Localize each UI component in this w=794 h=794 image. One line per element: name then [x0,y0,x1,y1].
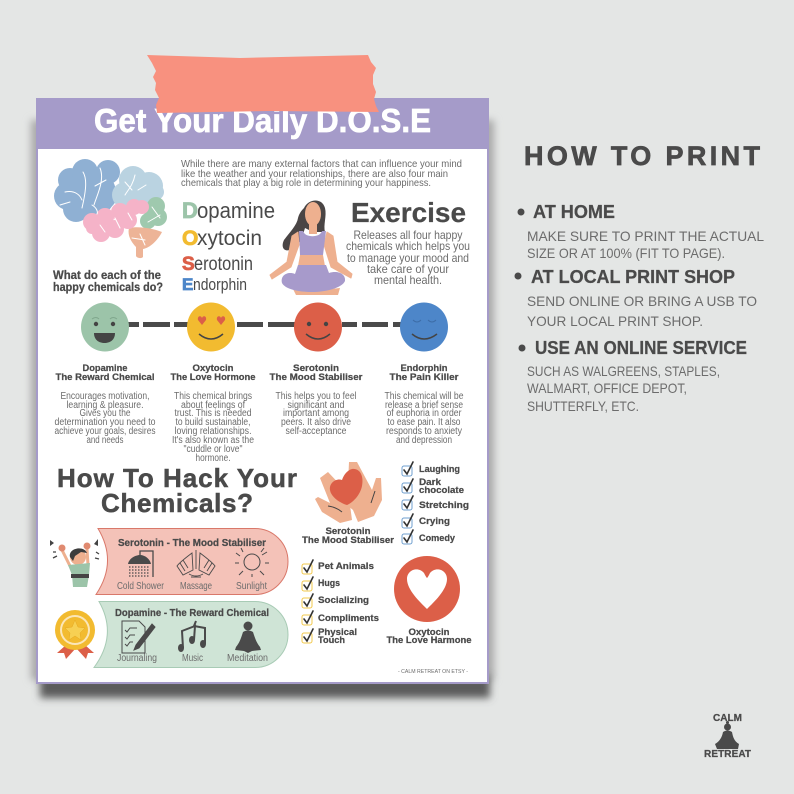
serotonin caption [302,526,394,546]
column: serotonin: important among [283,408,349,419]
checklist: oxytocin [302,560,379,646]
icon: award medal [55,610,95,659]
panel: serotonin hacks [96,528,288,594]
exercise text [346,228,470,287]
print option: at home: SIZE OR AT 100% (FIT TO PAGE). [527,245,725,261]
column: endorphin: This chemical will be [384,391,464,402]
column: endorphin: The Pain Killer [390,372,459,383]
print option: online service [518,338,747,414]
serotonin caption: The Mood Stabiliser [302,535,394,546]
panel: serotonin hacks: Serotonin - The Mood Stabiliser [118,537,266,549]
icon: massage hands [177,550,215,577]
checklist: oxytocin: Touch [318,635,345,646]
question heading: happy chemicals do? [53,282,163,294]
exercise text: Releases all four happy [354,228,462,242]
D.O.S.E list: erotonin [194,254,253,275]
face: dopamine [81,302,129,352]
checklist: oxytocin: Compliments [318,613,379,624]
print option: at home: AT HOME [533,202,615,222]
print option: at home: MAKE SURE TO PRINT THE ACTUAL [527,228,764,244]
column: dopamine: Encourages motivation, [60,391,150,402]
oxytocin caption [386,627,472,646]
column: serotonin: peers. It also drive [281,417,351,428]
column: serotonin: self-acceptance [286,426,347,437]
dashed connector [128,322,402,327]
poster panel [36,55,489,684]
print option: local print shop [514,267,757,329]
checklist: serotonin: Stretching [419,500,469,511]
D.O.S.E list: xytocin [197,227,262,250]
panel: dopamine hacks: Dopamine - The Reward Chemical [115,607,269,619]
washi tape [147,55,379,113]
column: dopamine: Gives you the [80,408,131,419]
intro text [181,158,462,189]
column: oxytocin: The Love Hormone [170,372,256,383]
label: massage: Massage [180,581,212,592]
checklist: serotonin: chocolate [419,485,464,496]
column: endorphin: release a brief sense [385,400,463,411]
checklist: serotonin [402,462,469,544]
icon: heart circle [394,556,460,622]
oxytocin caption: Oxytocin [408,627,450,638]
icon: journal [122,621,155,653]
face: serotonin [294,302,342,352]
column: oxytocin: loving relationships. [174,426,252,437]
label: music: Music [182,653,203,664]
illustration: meditating woman [270,200,352,295]
print option: online service: SUCH AS WALGREENS, STAPLES, [527,363,720,379]
D.O.S.E list: E [182,275,193,294]
illustration: excited boy [50,539,99,587]
column: oxytocin [170,363,256,464]
column: serotonin: significant and [288,400,344,411]
column: oxytocin: trust. This is needed [174,408,252,419]
how to print heading: HOW TO PRINT [524,141,760,171]
logo: calm retreat: RETREAT [704,749,751,760]
intro text: While there are many external factors that can influence your mind [181,158,462,170]
column: dopamine: determination you need to [54,417,156,428]
logo: calm retreat [704,713,751,760]
column: oxytocin: hormone. [196,453,230,464]
column: endorphin: responds to anxiety [386,426,462,437]
print option: online service: WALMART, OFFICE DEPOT, [527,380,687,396]
face: oxytocin [187,302,235,352]
label: sunlight: Sunlight [236,581,267,592]
checklist: oxytocin: Pet Animals [318,561,374,572]
D.O.S.E list [182,198,275,294]
exercise heading: Exercise [351,197,466,228]
exercise text: to manage your mood and [347,251,469,265]
exercise text: take care of your [367,262,449,276]
column: oxytocin: Oxytocin [192,363,234,374]
serotonin caption: Serotonin [326,526,371,537]
column: oxytocin: It's also known as the [172,435,254,446]
print option: at home [518,202,764,261]
D.O.S.E list: opamine [197,198,275,223]
column: oxytocin: to build sustainable, [176,417,250,428]
icon: brain [54,159,167,258]
column: oxytocin: "cuddle or love" [184,444,243,455]
column: endorphin: of euphoria in order [386,408,462,419]
column: endorphin [384,363,464,446]
column: dopamine: achieve your goals, desires [54,426,156,437]
column: oxytocin: This chemical brings [174,391,252,402]
oxytocin caption: The Love Harmone [386,635,472,646]
checklist: oxytocin: Socializing [318,595,369,606]
checklist: serotonin: Laughing [419,464,460,475]
title: Get Your Daily D.O.S.E [94,102,431,139]
icon: meditation figure [235,622,261,653]
section heading: How To Hack Your [57,463,297,493]
icon: shower [128,551,153,577]
label: journaling: Journaling [117,653,157,664]
label: cold shower: Cold Shower [117,581,165,592]
face: endorphin [400,302,448,352]
logo: calm retreat: CALM [713,713,742,724]
section heading [57,463,297,518]
icon: sun [235,548,269,577]
print option: local print shop: YOUR LOCAL PRINT SHOP. [527,313,703,329]
exercise text: mental health. [374,273,442,287]
column: serotonin: Serotonin [293,363,339,374]
checklist: serotonin: Dark [419,477,442,488]
footer credit: - CALM RETREAT ON ETSY - [398,669,468,675]
print option: local print shop: SEND ONLINE OR BRING A USB TO [527,293,757,309]
print option: online service: USE AN ONLINE SERVICE [535,338,747,358]
print option: local print shop: AT LOCAL PRINT SHOP [531,267,735,287]
column: serotonin: This helps you to feel [276,391,356,402]
column: serotonin: The Mood Stabiliser [270,372,363,383]
section heading: Chemicals? [101,488,253,518]
question heading: What do each of the [53,270,161,282]
label: meditation: Meditation [227,653,268,664]
column: dopamine: learning & pleasure. [66,400,144,411]
column: serotonin [270,363,363,437]
exercise text: chemicals which helps you [346,239,470,253]
checklist: serotonin: Crying [419,516,450,527]
column: dopamine: and needs [86,435,124,446]
D.O.S.E list: ndorphin [193,275,247,294]
column: dopamine: Dopamine [82,363,128,374]
intro text: chemicals that play a big role in determining your happiness. [181,177,431,189]
D.O.S.E list: D [182,198,198,223]
column: endorphin: to ease pain. It also [388,417,461,428]
column: oxytocin: about feelings of [181,400,245,411]
illustration: hands holding heart [315,462,382,523]
icon: music notes [178,621,206,652]
column: endorphin: and depression [396,435,452,446]
column: dopamine [54,363,156,446]
checklist: oxytocin: Hugs [318,578,340,589]
column: endorphin: Endorphin [400,363,448,374]
intro text: like the weather and your relationships, there are also four main [181,168,448,180]
print option: online service: SHUTTERFLY, ETC. [527,398,639,414]
D.O.S.E list: O [182,227,198,250]
column: dopamine: The Reward Chemical [56,372,154,383]
checklist: oxytocin: Physical [318,627,357,638]
checklist: serotonin: Comedy [419,533,456,544]
panel: dopamine hacks [94,602,288,668]
question heading [53,270,163,294]
D.O.S.E list: S [182,254,195,275]
